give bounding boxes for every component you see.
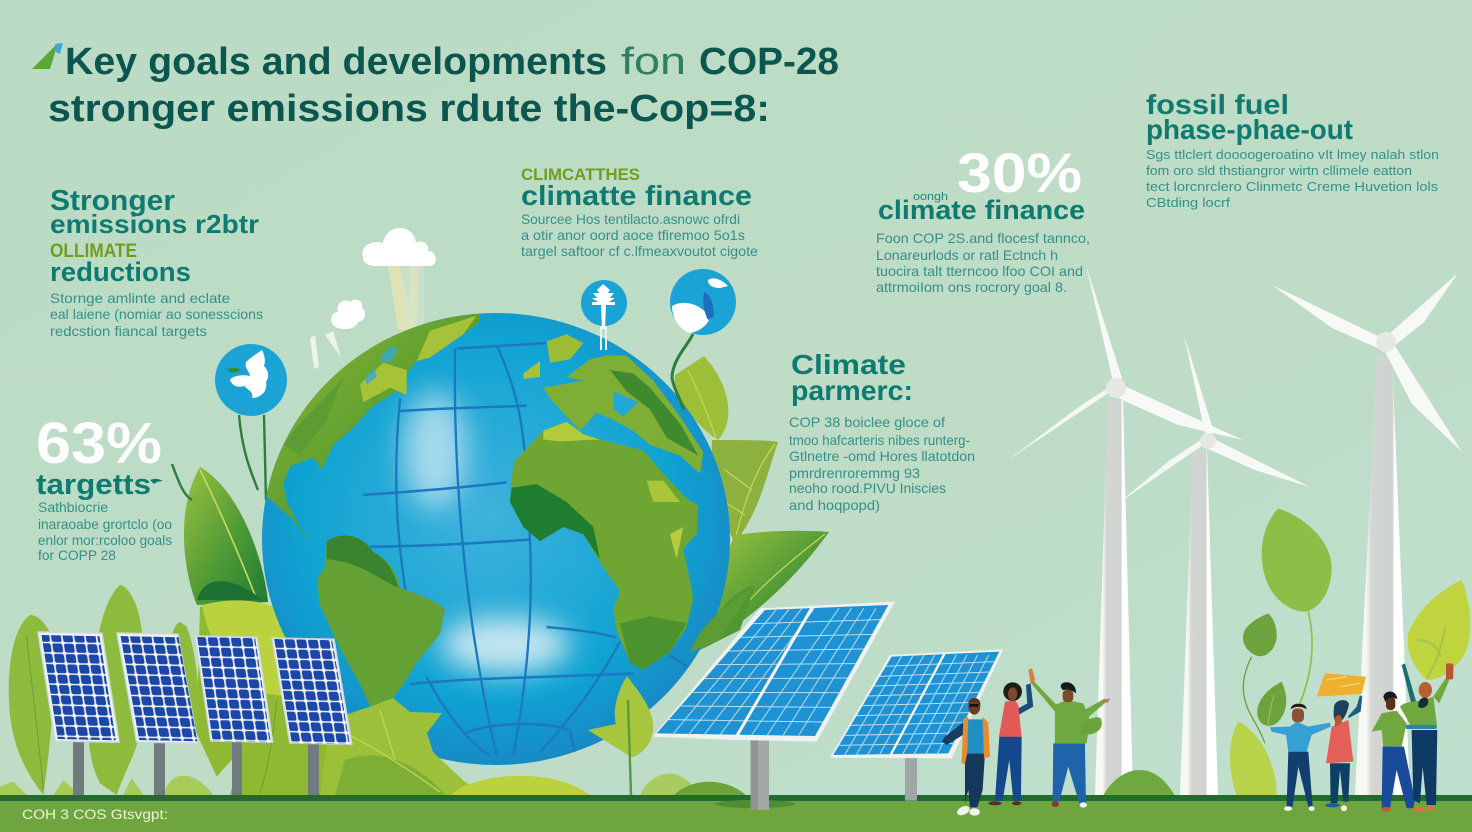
leaf: left large [184, 467, 268, 605]
leaf: lime base [1230, 722, 1277, 795]
text block: stronger emissions reductions: OLLIMATE [50, 241, 137, 262]
text block: 63% targets: for COPP 28 [38, 547, 116, 563]
title: fon [621, 41, 686, 83]
bushes [640, 773, 700, 796]
leaf stem [1300, 612, 1312, 703]
text block: 30% climate finance: Foon COP 2S.and flocesf tannco, [876, 230, 1090, 246]
person: red dress with yellow box [1317, 673, 1366, 811]
text block: stronger emissions reductions: reductions [50, 257, 191, 287]
solar panels row left [38, 632, 352, 796]
text block: climate finance centre: CLIMCATTHES [521, 165, 640, 184]
text block: climate partners: Gtlnetre -omd Hores llatotdon [789, 448, 975, 464]
turbine 1 [1008, 265, 1243, 795]
highlights [403, 392, 467, 508]
panel poles [73, 742, 319, 796]
text block: fossil fuel phase-out: fossil fuel [1146, 89, 1289, 120]
icon: tower badge with stem [581, 280, 627, 350]
person: orange vest [942, 698, 990, 817]
icon: logo arrow [32, 43, 63, 69]
cloud: smoke plume and clouds above globe [310, 228, 436, 369]
person: blue shirt [1270, 704, 1331, 811]
leaf: top right [675, 356, 728, 440]
text block: climate finance centre: targel saftoor cf c.lfmeaxvoutot cigote [521, 243, 758, 259]
text block: fossil fuel phase-out: phase-phae-out [1146, 114, 1353, 145]
title: COP-28 [699, 41, 839, 83]
solar panel 4 [272, 638, 352, 744]
text block: climate finance centre: climatte finance [521, 180, 752, 211]
text block: climate partners: neoho rood.PIVU Iniscies [789, 480, 946, 496]
text block: 30% climate finance: attrmoiIom ons rocrory goal 8. [876, 279, 1067, 295]
mound [450, 776, 590, 796]
big solar panel [653, 602, 895, 810]
title [32, 41, 839, 130]
text block: 30% climate finance: climate finance [878, 195, 1085, 225]
title: Key goals and developments [65, 41, 607, 83]
text block: stronger emissions reductions: Stronger [50, 185, 175, 217]
leaf: lower-left yellow green [202, 600, 310, 700]
text block: climate partners: tmoo hafcarteris nibes runterg- [789, 432, 970, 448]
solar panel 2 [117, 633, 198, 743]
text block: stronger emissions reductions: redcstion fiancal targets [50, 323, 207, 339]
person: green shirt standing [1372, 691, 1415, 812]
text block: fossil fuel phase-out: CBtding locrf [1146, 195, 1230, 210]
solar panel 1 [38, 632, 119, 742]
text block: 30% climate finance: oongh [913, 191, 948, 203]
globe [260, 313, 730, 765]
leaf: lime right [1408, 580, 1470, 680]
leaf: large green [1262, 508, 1332, 612]
text block: climate partners: COP 38 boiclee gloce of [789, 414, 945, 430]
text block: climate finance centre: a otir anor oord aoce tfiremoo 5o1s [521, 227, 745, 243]
continent: north america and greenland [260, 314, 480, 548]
text block: 30% climate finance: tuocira talt tterncoo lfoo COI and [876, 263, 1083, 279]
leaf: right mid [712, 440, 778, 543]
text block: 63% targets: enlor mor:rcoloo goals [38, 532, 172, 548]
text block: 30% climate finance [876, 141, 1090, 295]
text block: fossil fuel phase-out: tect lorcnrclero Clinmetc Creme Huvetion lols [1146, 179, 1439, 194]
text block: climate partners: pmrdrenroremmg 93 [789, 465, 920, 481]
text block: 30% climate finance: Lonareurlods or ratl Ectnch h [876, 247, 1058, 263]
person: green shirt [1028, 668, 1110, 808]
text block: 63% targets [36, 411, 172, 563]
text block: fossil fuel phase-out: fom oro sld thstiangror wirtn cllimele eatton [1146, 163, 1412, 178]
continent: europe and asia [543, 356, 703, 473]
leaf: mid green [1257, 682, 1286, 726]
ground [0, 795, 1472, 832]
right side foliage [1230, 508, 1470, 795]
turbine 2 [1120, 335, 1310, 795]
text block: climate finance centre [521, 165, 758, 259]
text block: climate partners: parmerc: [791, 375, 913, 406]
text block: climate partners: and hoqpopd) [789, 497, 880, 513]
text block: climate finance centre: Sourcee Hos tentilacto.asnowc ofrdi [521, 211, 740, 227]
leaves behind globe [172, 356, 829, 700]
text block: stronger emissions reductions: emissions r2btr [50, 209, 259, 239]
text block: 63% targets: targetts [36, 469, 151, 501]
solar panel 3 [195, 636, 273, 742]
graticule [363, 343, 687, 756]
continent: africa [510, 422, 698, 670]
people group: left three [942, 668, 1110, 817]
solar arrays right of globe [653, 602, 1003, 810]
footer caption: COH 3 COS Gtsvgpt: [22, 807, 168, 822]
person: red top [988, 682, 1033, 805]
background foliage: left hedge [0, 585, 333, 795]
stems: left icon [172, 415, 266, 500]
turbine 3 [1272, 273, 1462, 795]
leaf: right lower [715, 531, 829, 640]
text block: climate partners: Climate [791, 349, 906, 380]
foreground leaves under globe [320, 585, 1175, 796]
people group: right four [1270, 663, 1453, 812]
text block: 63% targets: 63% [36, 411, 162, 476]
title: stronger emissions rdute the-Cop=8: [48, 88, 770, 130]
text block: stronger emissions reductions [50, 185, 263, 339]
text block: 63% targets: Sathbiocrie [38, 499, 108, 515]
text block: fossil fuel phase-out: Sgs ttlclert doooogeroatino vIt lmey nalah stlon [1146, 147, 1439, 162]
text block: 63% targets: inaraoabe grortclo (oo [38, 516, 172, 532]
continent: south america [317, 536, 445, 713]
text block: stronger emissions reductions: eal laiene (nomiar ao sonesscions [50, 306, 263, 322]
text block: 30% climate finance: 30% [957, 141, 1082, 204]
leaf right of globe low [690, 585, 755, 652]
leaf: small upright [588, 676, 653, 757]
small solar panel [830, 649, 1003, 801]
icon: left globe badge with stem [215, 344, 287, 416]
text block: climate partners [789, 349, 975, 513]
leaf: small dark green [1243, 613, 1277, 656]
icon: globe badge with plant stem [670, 269, 736, 410]
person: raised arms [1400, 663, 1453, 812]
wind turbines [1008, 265, 1462, 795]
text block: fossil fuel phase-out [1146, 89, 1439, 210]
text block: stronger emissions reductions: Stornge amlinte and eclate [50, 290, 230, 306]
